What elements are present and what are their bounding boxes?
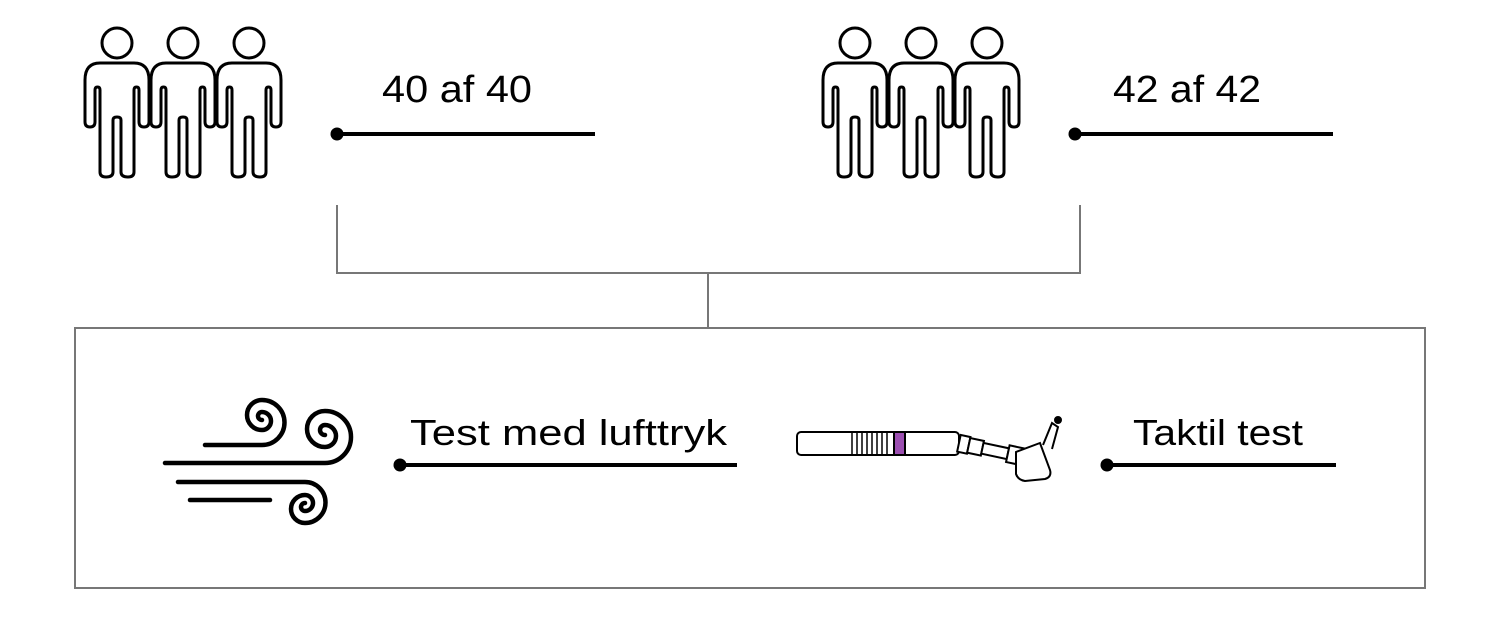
- icon: dental handpiece: [797, 417, 1061, 481]
- icon: people group 2: [823, 28, 1019, 177]
- label: Taktil test: Taktil test: [1133, 412, 1303, 453]
- icon: wind: [165, 400, 351, 523]
- label: 42 af 42: 42 af 42: [1113, 69, 1261, 111]
- panel: tests: [75, 328, 1425, 588]
- label: Taktil test: [1100, 412, 1336, 472]
- label: Test med lufttryk: [394, 412, 737, 472]
- label: Test med lufttryk: Test med lufttryk: [410, 412, 728, 453]
- label: 40 af 40: [330, 69, 595, 140]
- label: 42 af 42: [1068, 69, 1333, 140]
- icon: people group 1: [85, 28, 281, 177]
- connector: [337, 205, 1080, 327]
- label: 40 af 40: 40 af 40: [382, 69, 532, 111]
